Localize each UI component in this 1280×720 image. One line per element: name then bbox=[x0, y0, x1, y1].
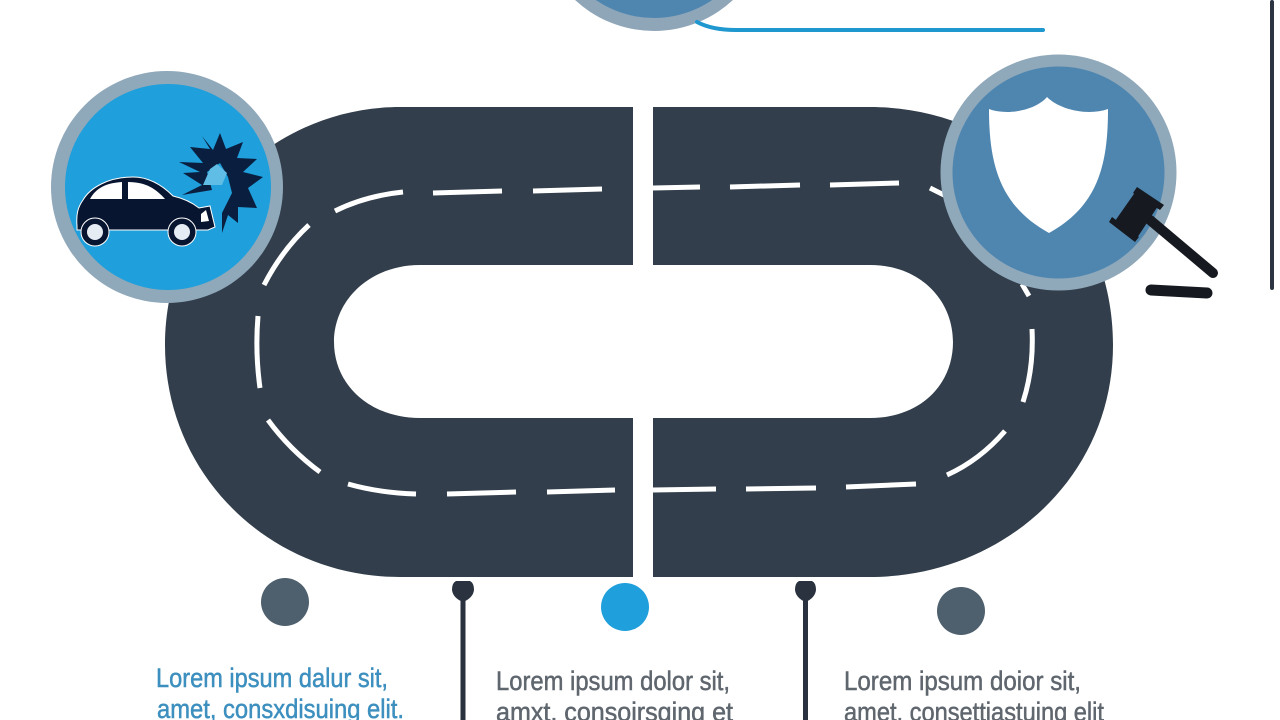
text block: centre: Lorem ipsum dolor sit, bbox=[496, 666, 730, 696]
top circle, partly cropped bbox=[538, 0, 770, 31]
crash burst bbox=[179, 133, 263, 233]
shield bbox=[989, 97, 1108, 233]
text block: right bbox=[844, 666, 1104, 720]
road centre dashes bbox=[257, 183, 1032, 494]
marker dot: centre bbox=[601, 583, 649, 631]
text block: centre bbox=[496, 666, 733, 720]
road: right half bbox=[653, 107, 1113, 577]
gavel base bbox=[1151, 290, 1207, 293]
burst highlight bbox=[203, 164, 227, 185]
car windows bbox=[90, 182, 165, 199]
text block: right: Lorem ipsum doior sit, bbox=[844, 666, 1081, 696]
car body bbox=[77, 177, 215, 230]
pin divider: right bbox=[795, 581, 816, 720]
blue connector line bbox=[697, 22, 1043, 30]
pin divider: left bbox=[452, 581, 474, 720]
car headlight bbox=[201, 210, 209, 222]
gavel bbox=[1109, 187, 1213, 273]
text block: left: Lorem ipsum dalur sit, bbox=[156, 663, 388, 693]
text block: left bbox=[156, 663, 404, 720]
icon: car crash bbox=[51, 71, 283, 303]
marker dot: left bbox=[261, 578, 309, 626]
right vertical line bbox=[1270, 0, 1274, 290]
car wheels bbox=[81, 218, 196, 246]
road: left half bbox=[165, 107, 633, 577]
icon: shield and gavel bbox=[940, 54, 1213, 293]
marker dot: right bbox=[937, 587, 985, 635]
